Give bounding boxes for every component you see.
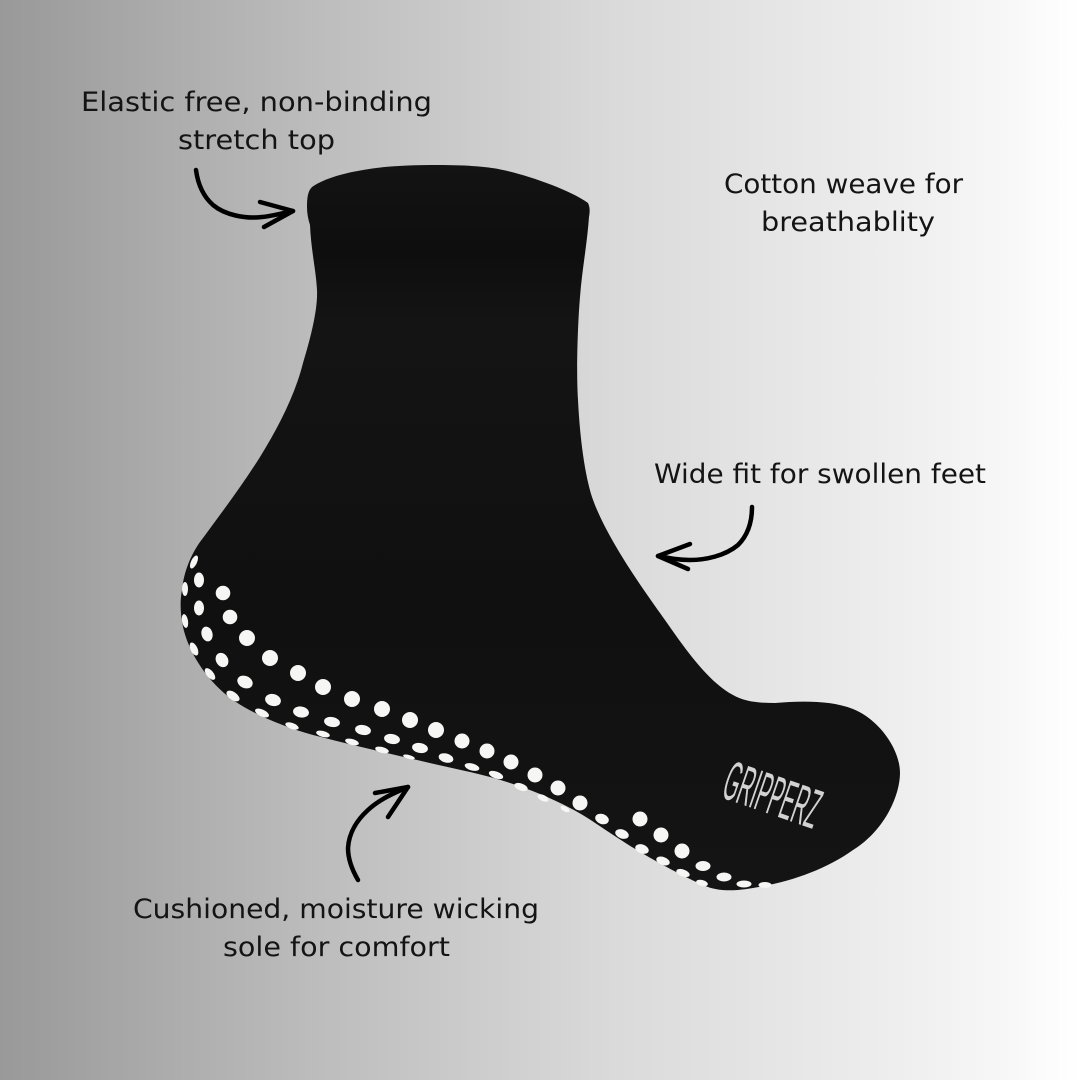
callout: stretch top: Elastic free, non-binding [81, 87, 432, 118]
sock body [181, 165, 900, 890]
callout: stretch top [81, 87, 432, 156]
middle row of dots [194, 572, 709, 887]
callout: stretch top: stretch top [178, 125, 335, 156]
outer row of heel dots [181, 554, 415, 760]
sock illustration [181, 165, 900, 890]
inner row of dots [216, 586, 771, 888]
grip dots [181, 554, 772, 888]
arrow: to sock top [196, 170, 293, 227]
callout: cotton weave: Cotton weave for [724, 169, 964, 200]
callout: cotton weave [724, 169, 964, 238]
sock illustration: GRIPPERZ [716, 749, 829, 840]
callout: wide fit: Wide fit for swollen feet [654, 459, 986, 490]
arrow: to ankle [658, 507, 752, 569]
callout: cushioned sole: Cushioned, moisture wicking [133, 894, 539, 925]
arrow: to sole [348, 787, 408, 880]
callout: cushioned sole [133, 894, 539, 963]
callout: cushioned sole: sole for comfort [223, 932, 450, 963]
callout: cotton weave: breathablity [761, 207, 935, 238]
